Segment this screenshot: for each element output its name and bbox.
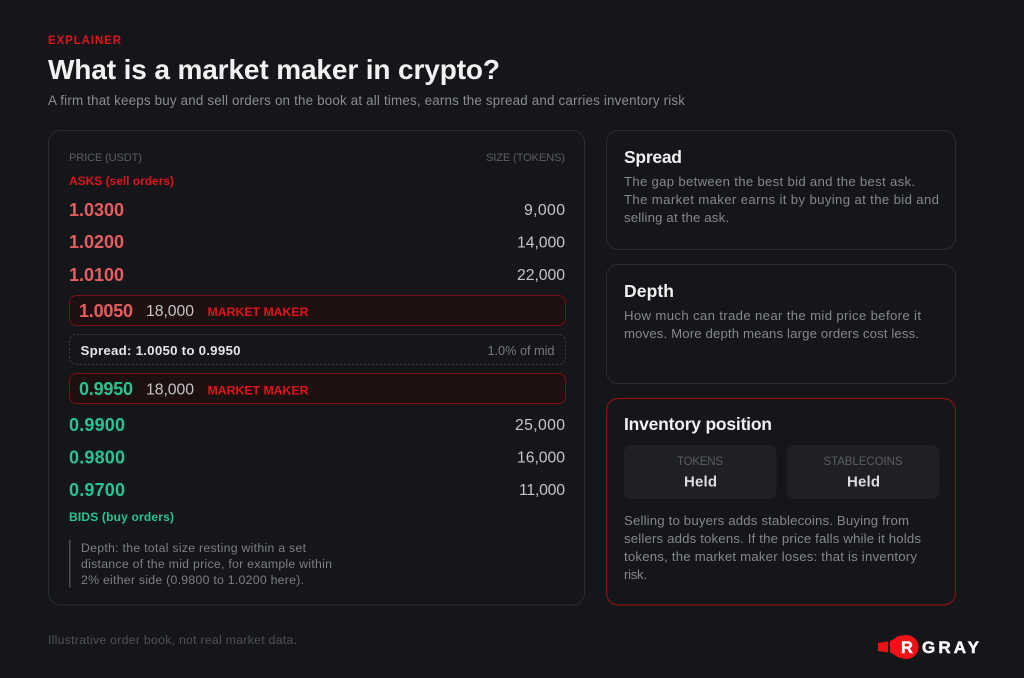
tile: stablecoins: STABLECOINS bbox=[824, 456, 903, 468]
spread row bbox=[70, 334, 566, 364]
bid row 2: 0.9800 bbox=[69, 448, 125, 468]
label: asks: ASKS (sell orders) bbox=[69, 174, 174, 188]
market maker ask row: MARKET MAKER bbox=[208, 305, 309, 319]
heading: depth: Depth bbox=[624, 281, 674, 301]
panel: order book bbox=[48, 130, 584, 605]
market maker bid row: MARKET MAKER bbox=[208, 384, 309, 398]
footnote: Illustrative order book, not real market data. bbox=[48, 633, 297, 647]
text: depth description: How much can trade near the mid price before it bbox=[624, 308, 921, 323]
text: depth description: moves. More depth means large orders cost less. bbox=[624, 326, 919, 341]
market maker ask row: 1.0050 bbox=[79, 301, 133, 321]
bid row 1 bbox=[69, 415, 565, 435]
depth note: 2% either side (0.9800 to 1.0200 here). bbox=[81, 573, 304, 587]
heading: inventory position: Inventory position bbox=[624, 414, 772, 434]
tile: stablecoins bbox=[787, 445, 940, 499]
column header: size: SIZE (TOKENS) bbox=[486, 152, 565, 164]
ask row 1 bbox=[69, 200, 565, 220]
logo: RGRAY: GRAY bbox=[922, 638, 980, 657]
depth note: distance of the mid price, for example within bbox=[81, 557, 332, 571]
text: inventory description: risk. bbox=[624, 567, 647, 582]
ask row 3: 1.0100 bbox=[69, 265, 124, 285]
bid row 3: 11,000 bbox=[519, 482, 565, 499]
spread row: 1.0% of mid bbox=[488, 343, 554, 358]
ask row 3: 22,000 bbox=[517, 267, 565, 284]
tile: tokens: Held bbox=[684, 474, 717, 490]
text: spread description: The market maker earns it by buying at the bid and bbox=[624, 192, 939, 207]
spread row: Spread: 1.0050 to 0.9950 bbox=[80, 343, 240, 358]
text: spread description: selling at the ask. bbox=[624, 210, 729, 225]
text: inventory description bbox=[624, 513, 921, 582]
column header: price: PRICE (USDT) bbox=[69, 152, 142, 164]
text: spread description: The gap between the best bid and the best ask. bbox=[624, 174, 915, 189]
ask row 2: 1.0200 bbox=[69, 232, 124, 252]
depth note: Depth: the total size resting within a set bbox=[81, 541, 307, 555]
ask row 1: 1.0300 bbox=[69, 200, 124, 220]
text: inventory description: Selling to buyers adds stablecoins. Buying from bbox=[624, 513, 909, 528]
eyebrow: explainer: EXPLAINER bbox=[48, 35, 122, 47]
bid row 3: 0.9700 bbox=[69, 480, 125, 500]
tile: tokens: TOKENS bbox=[677, 456, 723, 468]
logo: RGRAY bbox=[878, 635, 980, 659]
heading: spread: Spread bbox=[624, 147, 682, 167]
panel: depth bbox=[606, 264, 956, 384]
text: inventory description: tokens, the market maker loses: that is inventory bbox=[624, 549, 917, 564]
title: What is a market maker in crypto? bbox=[48, 54, 500, 85]
tile: tokens bbox=[624, 445, 776, 499]
bid row 1: 0.9900 bbox=[69, 415, 125, 435]
bid row 2: 16,000 bbox=[517, 450, 565, 466]
text: spread description bbox=[624, 174, 939, 225]
bid row 2 bbox=[69, 448, 565, 468]
ask row 2 bbox=[69, 232, 565, 252]
text: depth description bbox=[624, 308, 921, 341]
logo: RGRAY: R bbox=[901, 639, 913, 657]
ask row 1: 9,000 bbox=[524, 202, 565, 219]
market maker ask row: 18,000 bbox=[146, 303, 194, 320]
panel: spread bbox=[606, 130, 956, 250]
market maker bid row: 0.9950 bbox=[79, 379, 133, 399]
ask row 2: 14,000 bbox=[517, 234, 565, 252]
label: bids: BIDS (buy orders) bbox=[69, 510, 174, 524]
depth note bbox=[69, 540, 332, 588]
ask row 3 bbox=[69, 265, 565, 285]
tile: stablecoins: Held bbox=[847, 474, 880, 490]
panel: inventory position bbox=[606, 398, 956, 605]
market maker ask row bbox=[70, 296, 566, 326]
text: inventory description: sellers adds tokens. If the price falls while it holds bbox=[624, 531, 921, 546]
bid row 1: 25,000 bbox=[515, 417, 565, 434]
bid row 3 bbox=[69, 480, 565, 500]
market maker bid row: 18,000 bbox=[146, 382, 194, 398]
subtitle: A firm that keeps buy and sell orders on the book at all times, earns the spread and carries inventory risk bbox=[48, 93, 685, 108]
market maker bid row bbox=[70, 374, 566, 404]
